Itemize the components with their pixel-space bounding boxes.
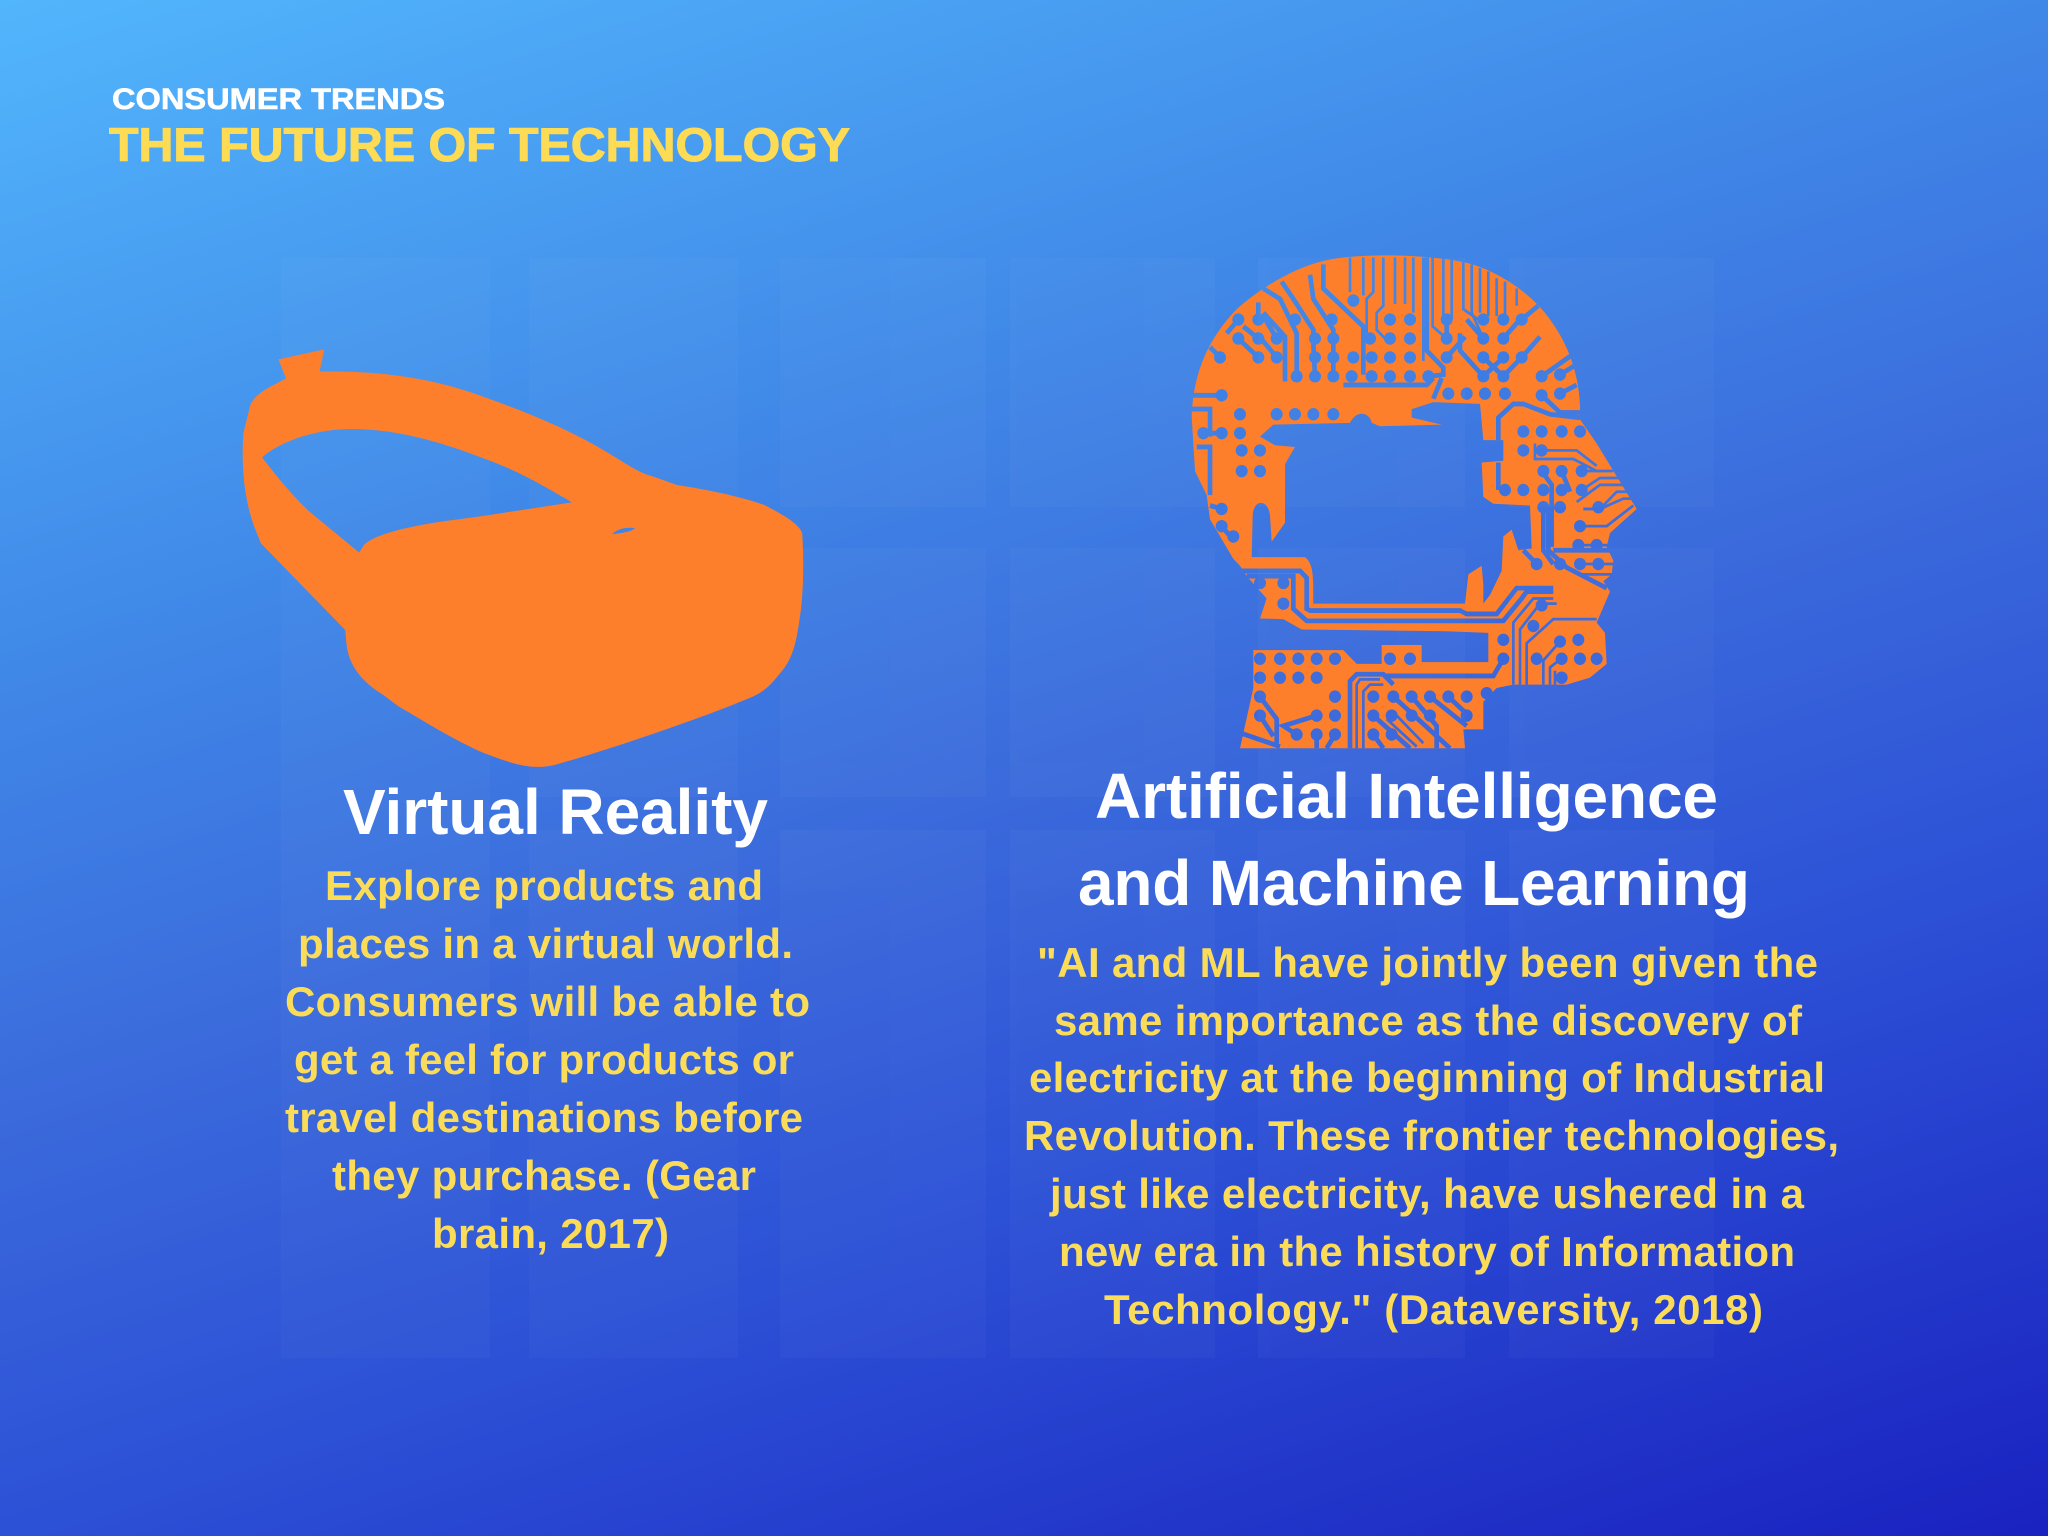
- eyebrow title: CONSUMER TRENDS: [112, 83, 445, 116]
- text block: AI and ML description: "AI and ML have jointly been given the: [1037, 939, 1818, 986]
- text block: AI and ML description: Revolution. These frontier technologies,: [1024, 1112, 1839, 1159]
- text block: Virtual Reality description: get a feel for products or: [294, 1036, 794, 1083]
- text block: Virtual Reality description: brain, 2017): [432, 1210, 669, 1257]
- icon: VR headset: [243, 349, 803, 767]
- text block: AI and ML description: same importance as the discovery of: [1054, 997, 1803, 1044]
- heading: Artificial Intelligence and Machine Learning: and Machine Learning: [1078, 847, 1750, 919]
- text block: AI and ML description: new era in the history of Information: [1059, 1228, 1795, 1275]
- text block: Virtual Reality description: Consumers will be able to: [285, 978, 810, 1025]
- text block: AI and ML description: electricity at the beginning of Industrial: [1029, 1054, 1825, 1101]
- text block: AI and ML description: just like electricity, have ushered in a: [1049, 1170, 1805, 1217]
- text block: Virtual Reality description: they purchase. (Gear: [332, 1152, 756, 1199]
- text block: Virtual Reality description: travel destinations before: [285, 1094, 803, 1141]
- heading: Artificial Intelligence and Machine Learning: [1078, 760, 1750, 919]
- icon: circuit board head: [1192, 255, 1637, 748]
- main title: THE FUTURE OF TECHNOLOGY: [109, 118, 850, 171]
- background panels: [281, 258, 1714, 1358]
- heading: Artificial Intelligence and Machine Learning: Artificial Intelligence: [1095, 760, 1718, 832]
- text block: Virtual Reality description: [285, 862, 810, 1257]
- text block: AI and ML description: [1024, 939, 1839, 1333]
- heading: Virtual Reality: Virtual Reality: [343, 776, 768, 848]
- text block: AI and ML description: Technology." (Dataversity, 2018): [1104, 1286, 1763, 1333]
- text block: Virtual Reality description: places in a virtual world.: [298, 920, 793, 967]
- text block: Virtual Reality description: Explore products and: [325, 862, 763, 909]
